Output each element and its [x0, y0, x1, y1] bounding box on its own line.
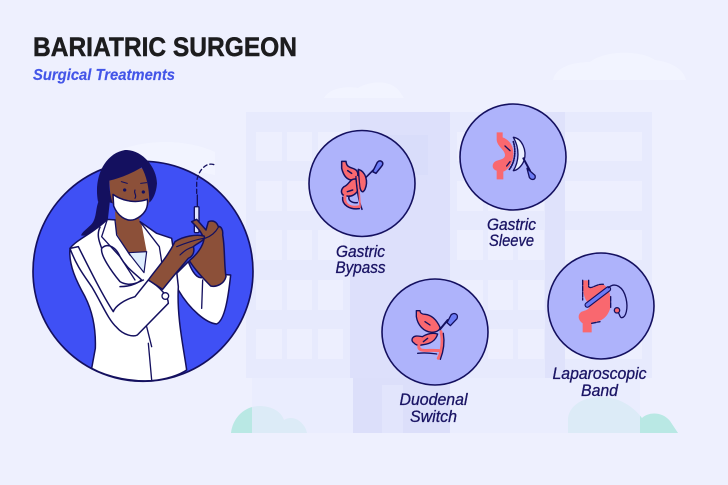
label: Laparoscopic — [552, 365, 647, 383]
treatment: gastric sleeve — [460, 104, 566, 250]
illustration: surgeon in blue circle — [33, 150, 253, 381]
syringe — [194, 164, 215, 233]
background: left bushes — [231, 406, 307, 433]
neck and chest — [115, 212, 147, 253]
background: clouds — [120, 53, 686, 175]
label: Sleeve — [489, 232, 534, 250]
blue circle backdrop — [33, 161, 253, 381]
subtitle: Surgical Treatments — [33, 67, 175, 84]
treatment: duodenal switch — [382, 279, 488, 426]
ponytail — [81, 198, 110, 236]
label — [552, 365, 647, 400]
treatment: gastric bypass — [309, 130, 415, 277]
label: Switch — [410, 408, 457, 426]
circle — [460, 104, 566, 210]
label: Bypass — [336, 259, 386, 277]
stomach icon — [579, 280, 627, 332]
circle — [548, 253, 654, 359]
background: hospital building — [246, 112, 652, 433]
finger lines — [177, 227, 218, 255]
label: Gastric — [336, 243, 386, 261]
undershirt — [128, 252, 147, 273]
label: Duodenal — [400, 391, 469, 409]
title: BARIATRIC SURGEON — [33, 32, 297, 62]
face — [109, 168, 149, 218]
label: Gastric — [487, 216, 537, 234]
right coat sleeve — [177, 262, 231, 324]
label: Band — [581, 382, 619, 400]
surgical mask — [113, 194, 148, 220]
hair — [97, 150, 157, 203]
white coat — [70, 219, 187, 381]
stethoscope — [98, 227, 143, 287]
forearm and hand holding syringe — [148, 235, 204, 289]
sleeve button — [162, 293, 169, 299]
stomach icon — [412, 311, 457, 359]
coat collar and seams — [102, 219, 203, 380]
label — [400, 391, 469, 426]
treatment: laparoscopic band — [548, 253, 654, 400]
eyes and nose — [121, 182, 147, 198]
circle — [382, 279, 488, 385]
raised hand and forearm — [189, 219, 226, 286]
stomach icon — [341, 161, 383, 209]
label — [487, 216, 537, 250]
stomach icon — [493, 132, 535, 179]
circle — [309, 130, 415, 236]
background: right bushes — [568, 397, 678, 433]
left coat sleeve — [70, 247, 168, 336]
label — [336, 243, 386, 277]
